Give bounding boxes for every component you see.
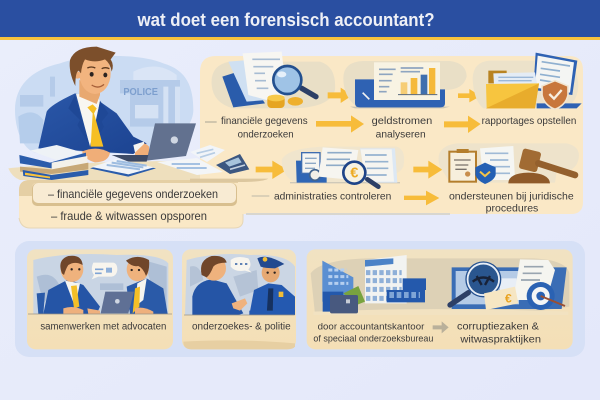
label: firm: of speciaal onderzoeksbureau	[313, 334, 433, 344]
arrow	[328, 88, 352, 103]
investigation illustration	[450, 259, 567, 310]
callout: desk tasks	[32, 183, 237, 223]
label: firm	[313, 321, 433, 344]
label: cases	[457, 321, 541, 345]
stack of files	[19, 145, 88, 180]
head	[79, 80, 100, 104]
label: money flows	[372, 116, 433, 140]
label: legal support	[449, 191, 574, 215]
label: money flows: analyseren	[376, 129, 426, 140]
icon: documents with euro magnifier: €	[350, 166, 358, 182]
arrow	[316, 115, 364, 133]
label: cases: corruptiezaken &	[457, 321, 539, 332]
person right	[127, 278, 168, 314]
laptop	[101, 292, 134, 313]
arrow	[458, 89, 481, 102]
label: legal support: ondersteunen bij juridische	[449, 191, 574, 202]
label: money flows: geldstromen	[372, 116, 433, 127]
label: reports: rapportages opstellen	[482, 116, 577, 127]
step row 1	[205, 52, 582, 140]
arrow	[404, 191, 439, 205]
label: audits: administraties controleren	[274, 191, 392, 202]
illustration: accountant at desk	[8, 47, 225, 180]
title: wat doet een forensisch accountant?	[137, 10, 434, 30]
police officer	[249, 283, 295, 315]
label: police: onderzoekes- & politie	[192, 321, 291, 332]
label: lawyers: samenwerken met advocaten	[40, 321, 166, 332]
investigation illustration: €	[505, 291, 512, 305]
police and city backdrop: POLICE	[123, 87, 159, 98]
laptop	[147, 123, 196, 161]
panel: duties process	[19, 56, 583, 228]
offices	[322, 255, 426, 313]
card: firm and cases	[307, 249, 573, 349]
arrow	[256, 161, 287, 179]
documents right	[157, 145, 225, 175]
icon: documents with euro magnifier	[282, 147, 404, 187]
arrow	[413, 161, 442, 179]
text: fraud: – fraude & witwassen opsporen	[51, 209, 207, 223]
panel: collaboration and cases	[15, 241, 585, 357]
icon: magnifier on financial documents	[212, 52, 335, 108]
speech bubble	[231, 257, 252, 273]
arrow	[433, 321, 449, 333]
open document	[90, 159, 156, 177]
text: financial data: – financiële gegevens onderzoeken	[48, 187, 218, 201]
desk	[8, 161, 200, 180]
header banner	[0, 0, 600, 40]
person left	[43, 279, 100, 314]
icon: chart on blue folder	[343, 61, 467, 108]
label: financial data: financiële gegevens	[221, 116, 308, 127]
icon: folder with shield	[473, 53, 582, 109]
card: police	[182, 249, 296, 349]
hands	[82, 149, 110, 162]
icon: calculator	[190, 154, 268, 182]
accountant from behind	[192, 279, 243, 315]
label: legal support: procedures	[486, 204, 538, 215]
label: firm: door accountantskantoor	[318, 321, 424, 331]
police and city backdrop	[15, 56, 193, 153]
icon: certificate, shield and gavel	[439, 143, 579, 184]
label: financial data	[205, 116, 308, 140]
suit	[38, 93, 147, 154]
card: lawyers	[27, 249, 173, 349]
label: financial data: onderzoeken	[238, 129, 294, 140]
speech bubble	[92, 263, 117, 279]
arrow	[444, 116, 481, 133]
step row 2	[190, 143, 579, 215]
label: cases: witwaspraktijken	[459, 334, 541, 345]
